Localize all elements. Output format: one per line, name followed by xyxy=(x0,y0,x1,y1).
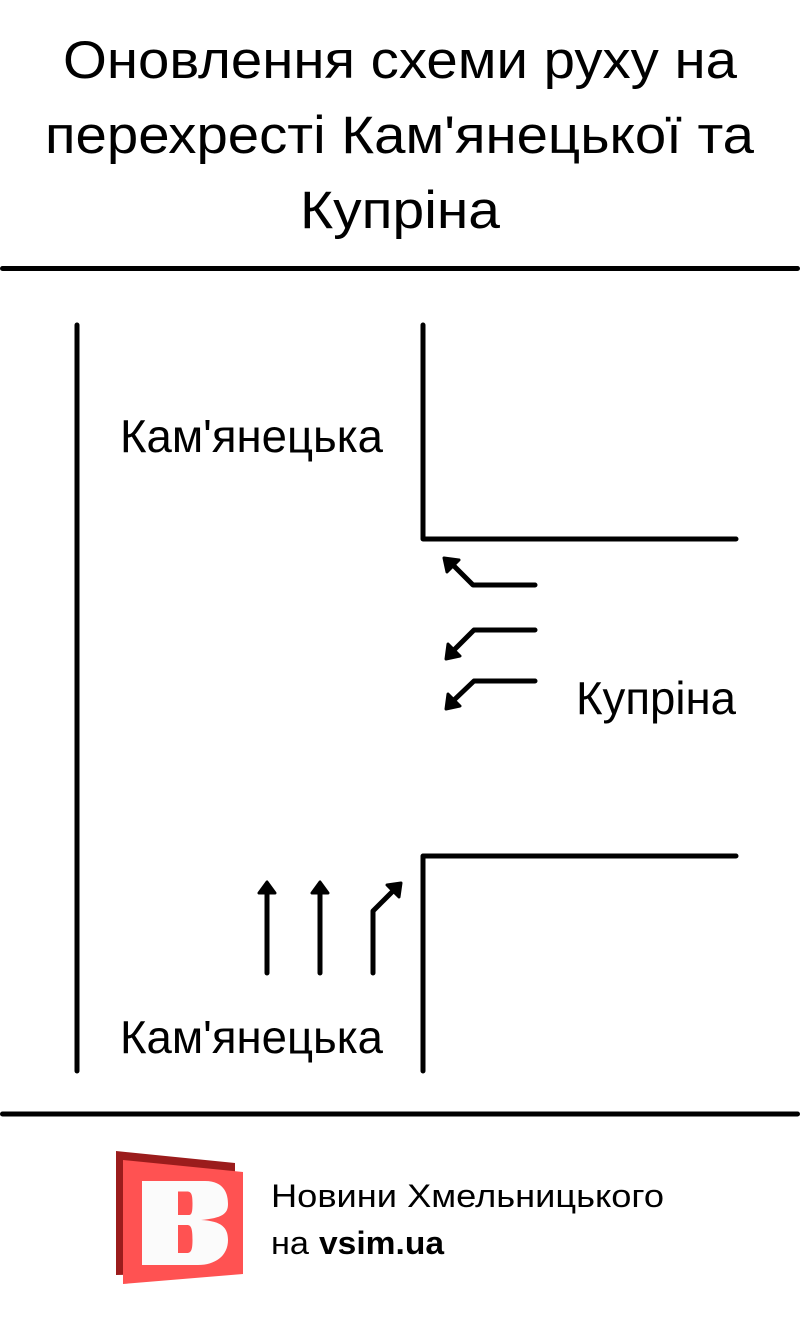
street label: Купріна: Купріна xyxy=(576,672,736,724)
arrow: left turn lower xyxy=(446,681,535,709)
arrows: Купріна approach xyxy=(444,558,535,709)
title: Купріна xyxy=(300,181,501,240)
footer text: Новини Хмельницького xyxy=(271,1178,664,1214)
footer text xyxy=(271,1178,664,1261)
arrow: right turn xyxy=(444,558,535,585)
arrow: left turn upper xyxy=(446,630,535,659)
street label: Кам'янецька north: Кам'янецька xyxy=(120,410,383,462)
logo: vsim.ua xyxy=(116,1151,243,1284)
arrows: Кам'янецька approach xyxy=(259,882,401,973)
arrow: straight middle lane xyxy=(312,882,328,973)
arrow: straight left lane xyxy=(259,882,275,973)
title: перехресті Кам'янецької та xyxy=(45,106,755,165)
arrow: right turn lane xyxy=(373,883,401,973)
title xyxy=(45,31,755,240)
footer text: vsim.ua xyxy=(319,1225,444,1261)
street label: Кам'янецька south: Кам'янецька xyxy=(120,1011,383,1063)
footer text: на xyxy=(271,1225,309,1261)
title: Оновлення схеми руху на xyxy=(63,31,738,90)
intersection road edges xyxy=(77,325,736,1071)
